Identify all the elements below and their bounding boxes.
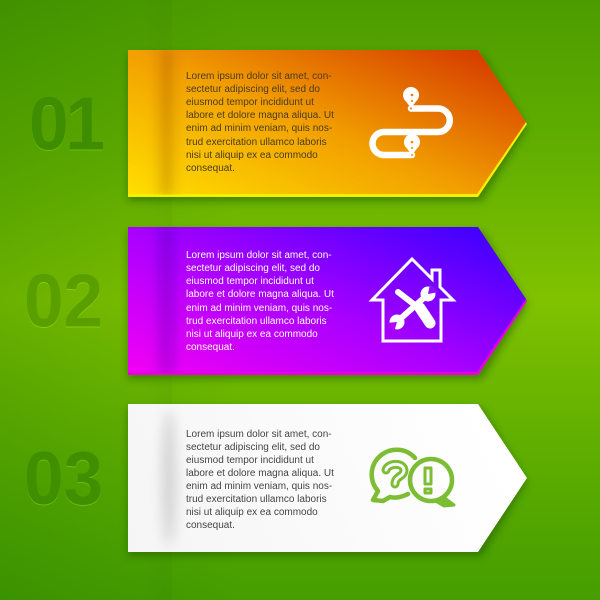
panel body	[128, 50, 526, 194]
panel fold shade	[162, 410, 176, 546]
panel text: eiusmod tempor incididunt ut	[186, 97, 314, 108]
panel text: labore et dolore magna aliqua. Ut	[186, 468, 334, 479]
panel text: nisi ut aliquip ex ea commodo	[186, 150, 318, 161]
panel text: labore et dolore magna aliqua. Ut	[186, 289, 334, 300]
panel text: trud exercitation ullamco laboris	[186, 137, 327, 148]
panel text: sectetur adipiscing elit, sed do	[186, 442, 320, 453]
panel text: Lorem ipsum dolor sit amet, con-	[186, 429, 332, 440]
panel text: labore et dolore magna aliqua. Ut	[186, 110, 334, 121]
panel shadow	[128, 408, 527, 556]
panel text: sectetur adipiscing elit, sed do	[186, 263, 320, 274]
panel text: trud exercitation ullamco laboris	[186, 494, 327, 505]
panel: orange arrow	[128, 48, 527, 201]
number 01: 01	[29, 83, 103, 167]
panel fold shade	[160, 225, 173, 375]
number 02: 02	[24, 260, 103, 344]
panel text: Lorem ipsum dolor sit amet, con-	[186, 250, 332, 261]
panel text: nisi ut aliquip ex ea commodo	[186, 329, 318, 340]
panel text: trud exercitation ullamco laboris	[186, 316, 327, 327]
panel text: enim ad minim veniam, quis nos-	[186, 481, 332, 492]
panel text: consequat.	[186, 342, 235, 353]
panel text: consequat.	[186, 163, 235, 174]
panel shadow	[128, 231, 527, 379]
panel body	[128, 404, 527, 552]
panel body	[128, 227, 526, 372]
panel fold shade	[160, 48, 173, 196]
panel text: eiusmod tempor incididunt ut	[186, 276, 314, 287]
panel text: nisi ut aliquip ex ea commodo	[186, 507, 318, 518]
icon: house with wrench and screwdriver	[372, 259, 453, 341]
panel edge highlight	[128, 227, 527, 375]
number 03: 03	[24, 436, 103, 520]
panel text	[186, 71, 334, 174]
panel text: Lorem ipsum dolor sit amet, con-	[186, 71, 332, 82]
number 02: 02	[24, 259, 103, 343]
panel: purple arrow	[128, 225, 527, 379]
number 01: 01	[29, 82, 103, 166]
number 03: 03	[24, 437, 103, 521]
panel: white arrow	[128, 404, 527, 556]
panel text: consequat.	[186, 520, 235, 531]
panel text: sectetur adipiscing elit, sed do	[186, 84, 320, 95]
icon: winding route with pins	[372, 87, 450, 156]
panel text: eiusmod tempor incididunt ut	[186, 455, 314, 466]
icon: question and exclamation speech bubbles	[372, 450, 454, 506]
panel text	[186, 429, 334, 531]
panel shadow	[128, 54, 527, 201]
panel text: enim ad minim veniam, quis nos-	[186, 303, 332, 314]
panel edge highlight	[128, 50, 527, 197]
panel text	[186, 250, 334, 353]
panel text: enim ad minim veniam, quis nos-	[186, 123, 332, 134]
